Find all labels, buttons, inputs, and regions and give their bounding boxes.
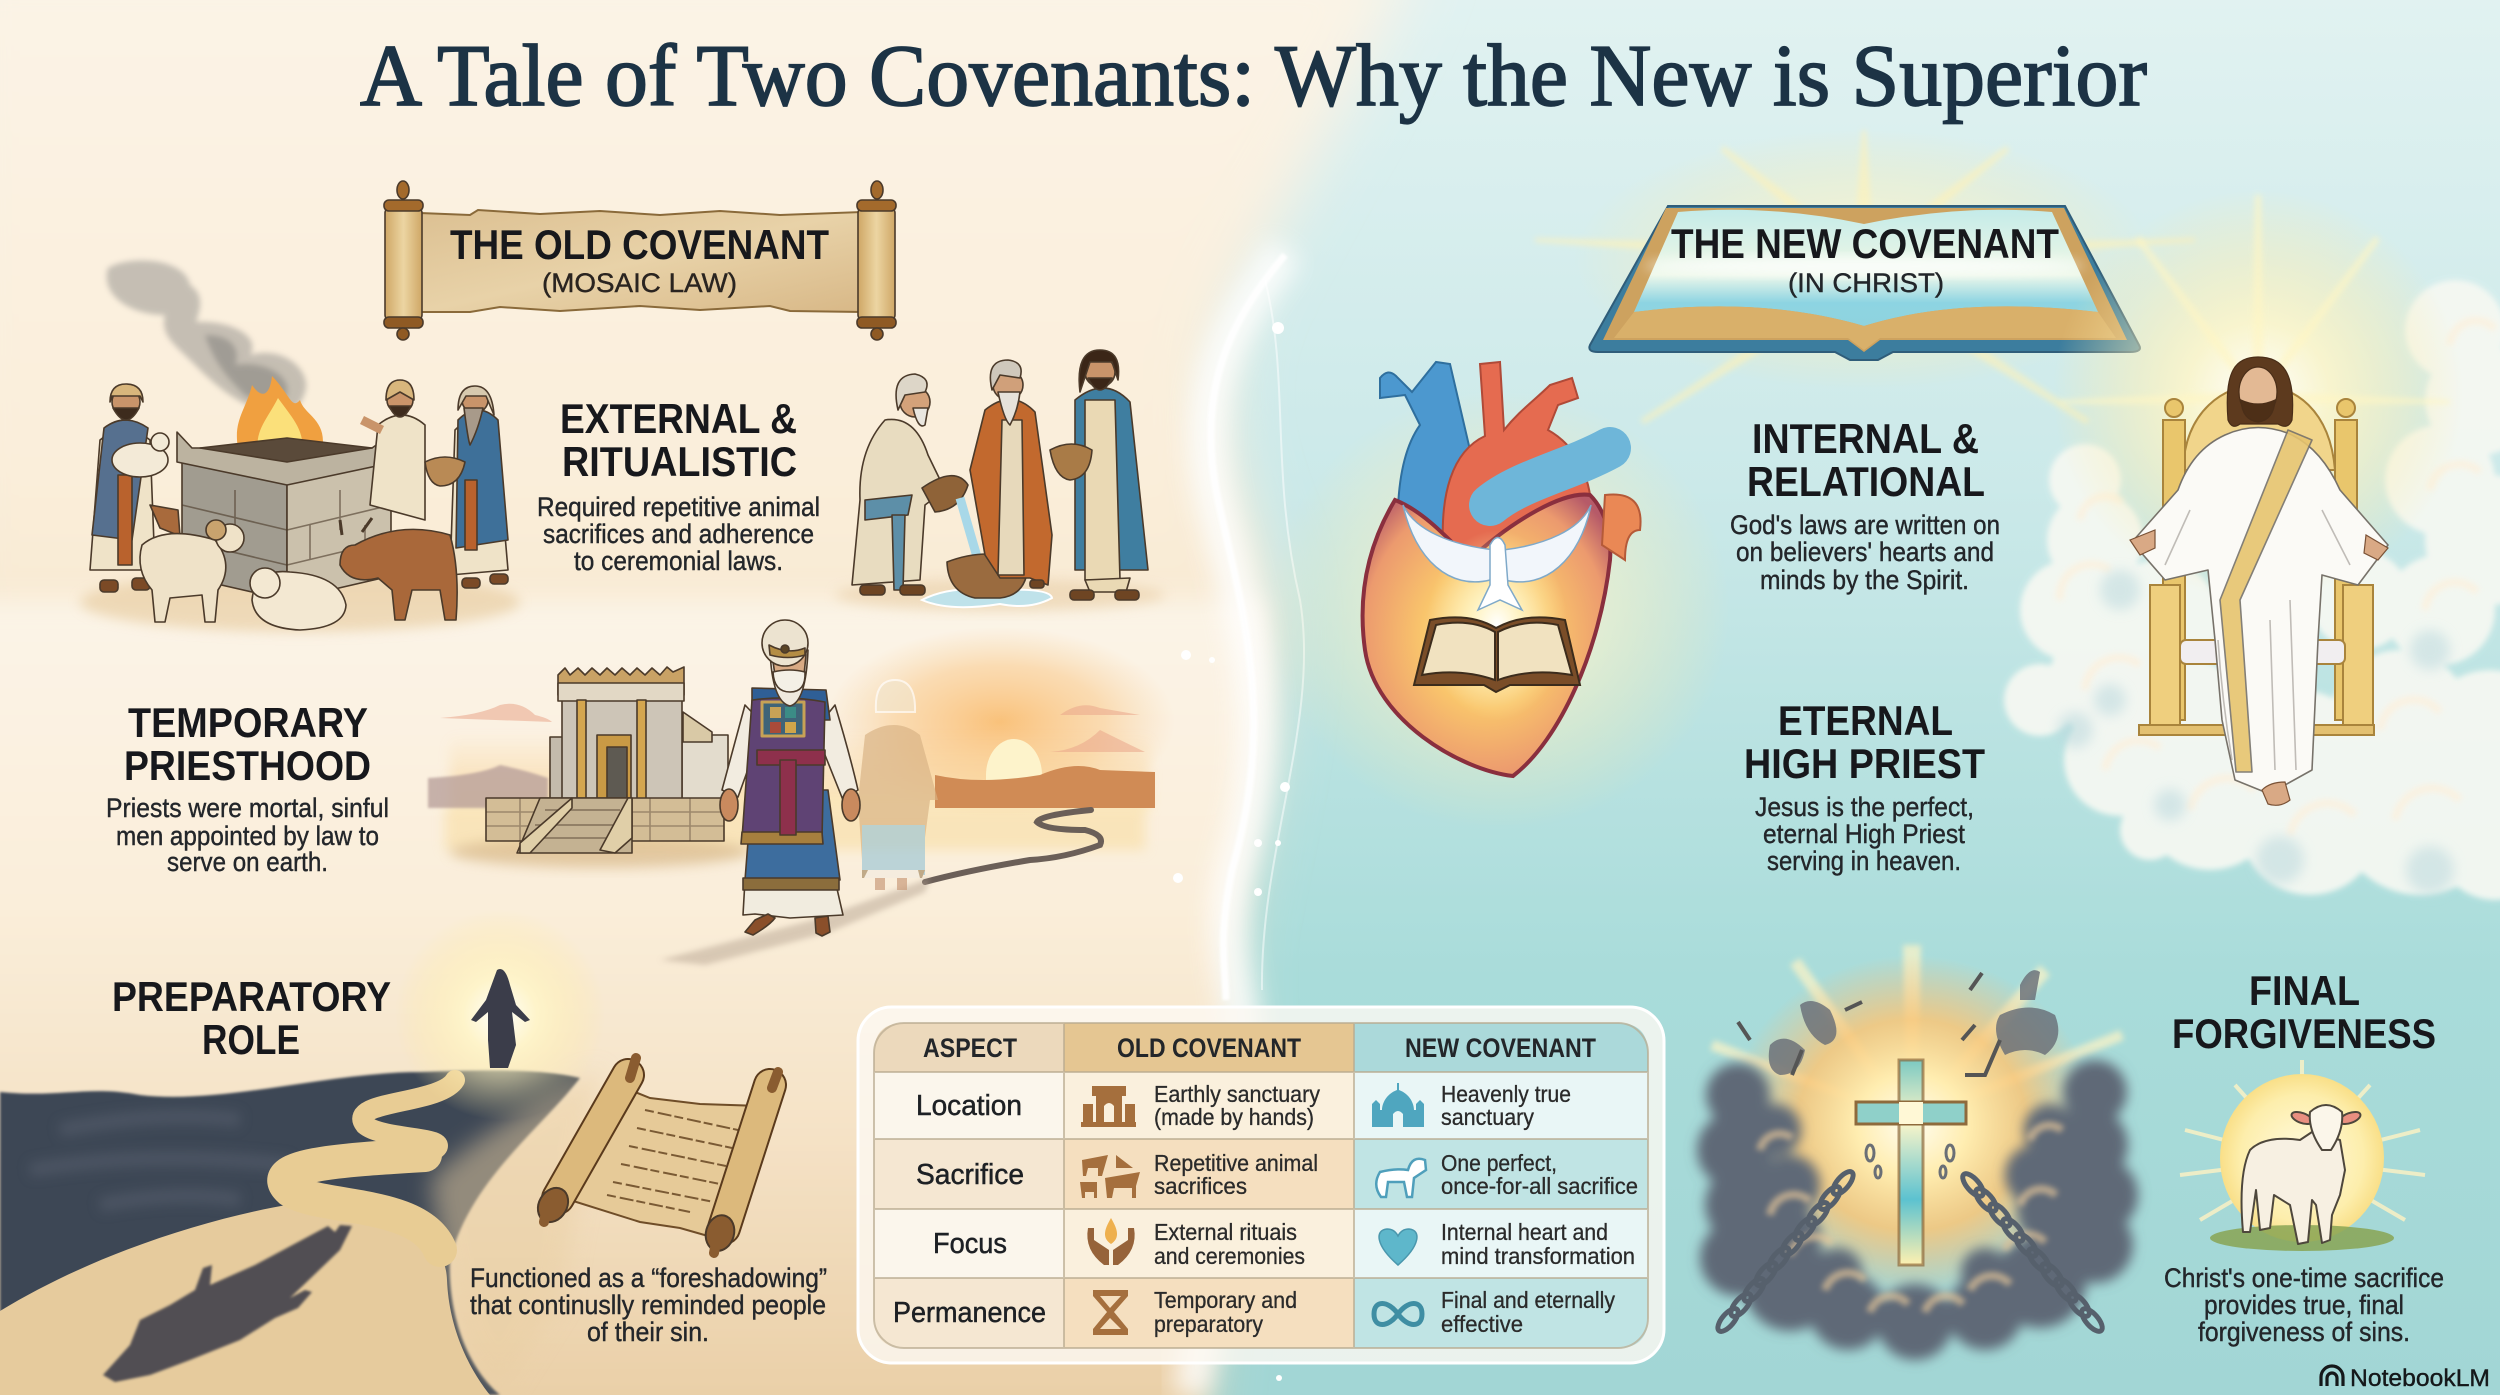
parchment (570, 1090, 760, 1240)
radiance (2053, 190, 2463, 600)
table card (858, 1007, 1664, 1363)
heading: ETERNAL (1778, 697, 1953, 744)
sand foreground (0, 1199, 490, 1395)
illustration: Jesus enthroned (2053, 190, 2463, 805)
sun (986, 739, 1042, 785)
text block: temporary priesthood: men appointed by law to (116, 821, 379, 851)
banner subheading: (MOSAIC LAW) (542, 268, 737, 298)
text block: final forgiveness description: forgiveness of sins. (2198, 1317, 2410, 1347)
long shadow of figure (103, 1225, 352, 1382)
scroll writing (607, 1110, 738, 1212)
text block: preparatory role heading: PREPARATORY (112, 973, 391, 1020)
table header row (874, 1023, 1648, 1072)
text block: temporary priesthood: serve on earth. (167, 847, 328, 877)
dark cloud puffs (1697, 1060, 2138, 1360)
text block: preparatory role heading (112, 973, 391, 1063)
left hill (428, 765, 548, 808)
blue cloud shade (2057, 570, 2454, 894)
row: sacrifice: sacrifices (1154, 1173, 1247, 1199)
praying priest (362, 380, 425, 520)
temple building (486, 667, 728, 853)
text block: external and ritualistic: sacrifices and adherence (543, 519, 814, 549)
halo (2220, 1074, 2384, 1242)
illustration: temple at sunset (428, 620, 1175, 965)
ground (450, 836, 750, 868)
left roller (384, 181, 423, 340)
text block: preparatory description: that continuslly reminded people (470, 1290, 826, 1320)
table grid lines (874, 1023, 1648, 1348)
title: A Tale of Two Covenants: Why the New is Superior (360, 28, 2147, 125)
row: focus: mind transformation (1441, 1243, 1635, 1269)
birds and debris (1738, 973, 2000, 1075)
description: Jesus is the perfect, (1755, 792, 1974, 822)
banner heading: THE OLD COVENANT (450, 221, 829, 268)
row: sacrifice: once-for-all sacrifice (1441, 1173, 1638, 1199)
robe (2132, 428, 2388, 795)
heading: INTERNAL & (1752, 415, 1979, 462)
row: location: Heavenly true (1441, 1081, 1571, 1107)
basin (947, 554, 1028, 598)
icon: infinity (1374, 1304, 1422, 1324)
banner subheading: (IN CHRIST) (1788, 268, 1944, 298)
text block: preparatory description: Functioned as a “foreshadowing” (470, 1263, 827, 1293)
upper dark fragments (1769, 970, 2058, 1075)
small goat (150, 505, 180, 536)
book page surface (1634, 210, 2098, 326)
description: Required repetitive animal (537, 492, 820, 522)
row: location: Location (916, 1090, 1022, 1122)
dark land (0, 1070, 580, 1395)
row: focus: and ceremonies (1154, 1243, 1305, 1269)
warm cloud rims (2060, 321, 2495, 835)
row: sacrifice (874, 1139, 1648, 1209)
banner: old covenant scroll (384, 181, 896, 340)
divider: glowing white wave (1173, 250, 1304, 1395)
hands and feet (2130, 530, 2388, 805)
head and beard (2227, 357, 2293, 426)
elder praying (970, 360, 1052, 588)
text block: final forgiveness heading: FORGIVENESS (2172, 1010, 2436, 1057)
row: focus: Focus (933, 1228, 1007, 1260)
high priest (720, 620, 860, 936)
orange atrium (1602, 494, 1641, 560)
text block: internal and relational: minds by the Spirit. (1760, 565, 1969, 595)
grass (2210, 1225, 2394, 1251)
icon: flame in hands (1087, 1218, 1135, 1265)
row: permanence: Final and eternally (1441, 1287, 1615, 1313)
text block: internal and relational: RELATIONAL (1747, 458, 1985, 505)
row: sacrifice: Sacrifice (916, 1159, 1024, 1191)
row: location: (made by hands) (1154, 1104, 1314, 1130)
water pool (922, 589, 1052, 607)
left roller (532, 1058, 636, 1228)
text block: final forgiveness description: Christ's one-time sacrifice (2164, 1263, 2444, 1293)
golden path (362, 1080, 455, 1155)
resting lamb (250, 568, 346, 630)
text block: final forgiveness description: provides true, final (2204, 1290, 2404, 1320)
right broken chain (1959, 1170, 2106, 1335)
row: permanence (874, 1278, 1648, 1348)
description: Priests were mortal, sinful (106, 793, 389, 823)
row: location (874, 1072, 1648, 1139)
halo rays (2180, 1060, 2425, 1220)
text block: eternal high priest: HIGH PRIEST (1744, 740, 1985, 787)
heading: TEMPORARY (128, 699, 368, 746)
row: focus (874, 1209, 1648, 1278)
banner heading: THE NEW COVENANT (1671, 220, 2059, 267)
illustration: heart with dove and book (1270, 362, 1730, 830)
text block: internal and relational (1730, 415, 2000, 595)
inner glow (1427, 530, 1567, 720)
row: focus: Internal heart and (1441, 1219, 1608, 1245)
row: location: Earthly sanctuary (1154, 1081, 1320, 1107)
sand below horizon (445, 808, 1145, 850)
text block: final forgiveness heading: FINAL (2249, 967, 2360, 1014)
elder pouring (852, 374, 968, 595)
glow behind distant figure (395, 910, 605, 1120)
description: God's laws are written on (1730, 510, 2000, 540)
red aorta (1443, 362, 1592, 600)
book glow (1574, 130, 2154, 390)
faded second priest (858, 680, 938, 890)
text block: internal and relational: on believers' hearts and (1736, 537, 1994, 567)
open book in heart (1414, 617, 1580, 692)
priest with bowl (425, 386, 508, 588)
right roller (702, 1072, 778, 1254)
dove (1403, 505, 1591, 610)
parchment (420, 210, 862, 312)
banner: new covenant open book (1535, 130, 2195, 424)
blue vessels (1380, 362, 1472, 540)
cloud highlights (1760, 1125, 2062, 1312)
row: sacrifice: Repetitive animal (1154, 1150, 1318, 1176)
illustration: ritual washing figures (835, 350, 1165, 611)
water stream (960, 498, 978, 560)
right hills (935, 766, 1155, 808)
row: location: sanctuary (1441, 1104, 1534, 1130)
row: focus: External rituais (1154, 1219, 1297, 1245)
younger man with bowl (1050, 350, 1148, 600)
text block: final forgiveness description (2164, 1263, 2444, 1347)
text block: external and ritualistic: to ceremonial laws. (574, 546, 783, 576)
text block: preparatory role heading: ROLE (202, 1016, 300, 1063)
row: permanence: preparatory (1154, 1311, 1263, 1337)
rays (1710, 945, 2124, 1118)
left broken chain (1714, 1168, 1857, 1335)
winding road (925, 810, 1101, 882)
illustration: winding path with shadow (0, 910, 605, 1395)
bull (340, 518, 457, 620)
heading: EXTERNAL & (560, 395, 797, 442)
text block: eternal high priest (1744, 697, 1985, 876)
right roller (857, 181, 896, 340)
illustration: cross breaking chains (1697, 945, 2138, 1360)
text block: temporary priesthood: PRIESTHOOD (124, 742, 371, 789)
comparison table (858, 1007, 1664, 1363)
row: permanence: Temporary and (1154, 1287, 1297, 1313)
illustration: lamb with halo (2180, 1060, 2425, 1251)
book cover (1589, 206, 2140, 360)
priest holding lamb (90, 384, 169, 592)
altar (177, 432, 395, 600)
cross (1856, 1060, 1966, 1265)
throne (2139, 385, 2374, 735)
icon: hourglass (1093, 1290, 1128, 1335)
icon: earthly temple (1081, 1086, 1136, 1127)
glow rays (1535, 130, 2195, 424)
radial glow (1727, 955, 2097, 1295)
loose chain links (1866, 1145, 1954, 1178)
text block: preparatory description: of their sin. (587, 1317, 709, 1347)
lamb body (2242, 1105, 2362, 1244)
table header row: ASPECT (923, 1033, 1017, 1063)
distant figure silhouette (471, 969, 530, 1068)
fire (237, 376, 323, 450)
icon: outlined lamb (1376, 1159, 1426, 1197)
text block: external and ritualistic (537, 395, 820, 576)
right blue vessel (1490, 448, 1610, 505)
icon: teal heart (1379, 1229, 1417, 1265)
text block: preparatory description (470, 1263, 827, 1347)
text block: external and ritualistic: RITUALISTIC (562, 438, 797, 485)
smoke (107, 261, 306, 417)
book page edges (1603, 208, 2127, 352)
row: permanence: Permanence (893, 1297, 1046, 1329)
sand fade at right of land (430, 1070, 600, 1395)
heart glow (1270, 390, 1730, 830)
icon: animals (1080, 1155, 1140, 1198)
text block: eternal high priest: eternal High Priest (1763, 819, 1966, 849)
illustration: altar sacrifice (80, 261, 520, 632)
text block: eternal high priest: serving in heaven. (1767, 846, 1961, 876)
clouds (440, 704, 1145, 752)
table header row: OLD COVENANT (1117, 1033, 1301, 1063)
illustration: open law scroll (532, 1058, 778, 1254)
row: permanence: effective (1441, 1311, 1523, 1337)
heart body (1363, 495, 1610, 776)
ram (140, 520, 244, 622)
row: sacrifice: One perfect, (1441, 1150, 1557, 1176)
illustration: clouds of heaven (2004, 280, 2500, 900)
table header row: NEW COVENANT (1405, 1033, 1596, 1063)
text block: final forgiveness heading (2172, 967, 2436, 1057)
text block: temporary priesthood (106, 699, 389, 877)
icon: heavenly sanctuary (1372, 1083, 1424, 1127)
lower pages (1614, 306, 2116, 350)
watermark: NotebookLM: NotebookLM (2350, 1365, 2490, 1392)
sky glow (825, 627, 1175, 817)
